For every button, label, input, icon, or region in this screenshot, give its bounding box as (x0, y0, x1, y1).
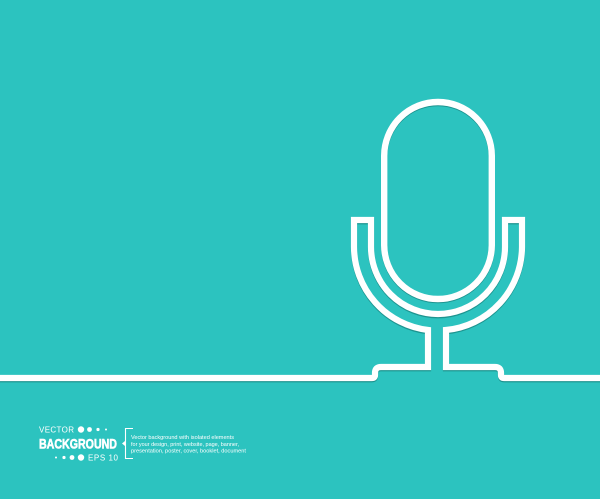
icon: microphone capsule (384, 102, 492, 300)
description text: for your design, print, website, page, banner, (131, 442, 239, 448)
icon: microphone holder, stem and baseline (0, 220, 600, 379)
logo: vector background eps 10 (39, 426, 119, 463)
description text: Vector background with isolated elements (131, 435, 234, 441)
bracket (122, 428, 133, 458)
icon: dots bottom row (55, 454, 84, 461)
text: BACKGROUND: BACKGROUND (39, 436, 117, 452)
description text: presentation, poster, cover, booklet, document (131, 448, 246, 454)
text: VECTOR: VECTOR (39, 426, 74, 435)
icon: dots top row (78, 426, 107, 433)
description text (131, 435, 246, 454)
text: EPS 10: EPS 10 (88, 454, 119, 463)
